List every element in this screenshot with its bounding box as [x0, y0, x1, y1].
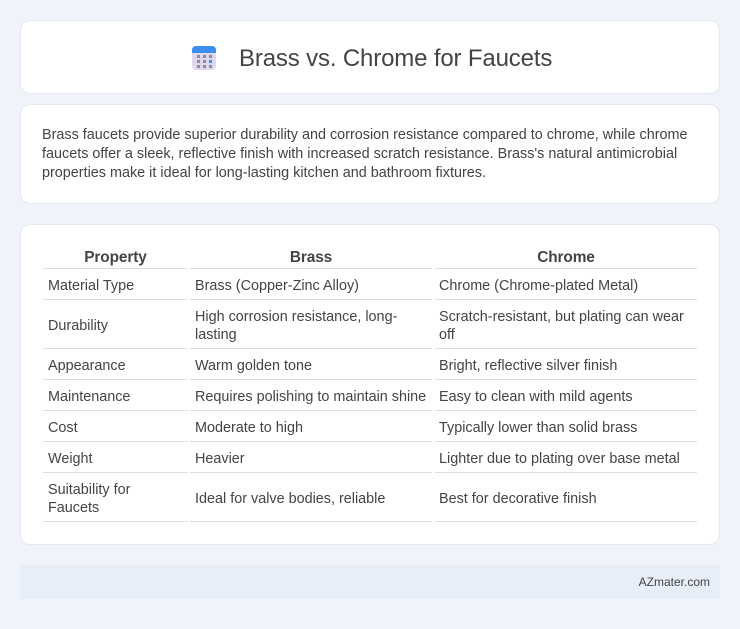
row: durability: High corrosion resistance, long-	[195, 309, 397, 325]
row: suitability for faucets: Faucets	[48, 500, 99, 516]
row: maintenance: Maintenance	[48, 389, 130, 405]
table header: Brass	[290, 249, 332, 266]
panel: summary	[20, 104, 720, 204]
row: suitability for faucets	[48, 482, 597, 516]
footer credit: AZmater.com	[639, 575, 710, 589]
row: maintenance	[48, 389, 633, 405]
row: appearance: Appearance	[48, 358, 126, 374]
row: durability: lasting	[195, 327, 237, 343]
row: cost: Moderate to high	[195, 420, 303, 436]
row: suitability for faucets: Ideal for valve bodies, reliable	[195, 491, 385, 507]
row: maintenance: Requires polishing to maintain shine	[195, 389, 426, 405]
panel: title card	[20, 20, 720, 94]
summary text: Brass faucets provide superior durability and corrosion resistance compared to chrome, while chrome	[42, 127, 687, 143]
table header	[84, 249, 595, 266]
footer bar	[20, 565, 720, 599]
row: material type: Brass (Copper-Zinc Alloy)	[195, 278, 359, 294]
row: maintenance: Easy to clean with mild agents	[439, 389, 633, 405]
table header: Chrome	[537, 249, 595, 266]
row: material type	[48, 278, 638, 294]
row: cost: Typically lower than solid brass	[439, 420, 637, 436]
row: appearance: Bright, reflective silver finish	[439, 358, 617, 374]
panel: comparison table	[20, 224, 720, 545]
row: weight: Heavier	[195, 451, 245, 467]
row: cost: Cost	[48, 420, 78, 436]
summary text: properties make it ideal for long-lasting kitchen and bathroom fixtures.	[42, 165, 486, 181]
row: durability: off	[439, 327, 455, 343]
summary text: faucets offer a sleek, reflective finish with increased scratch resistance. Brass's natural antimicrobial	[42, 146, 677, 162]
row: suitability for faucets: Best for decorative finish	[439, 491, 597, 507]
summary text	[42, 127, 687, 181]
row: durability: Durability	[48, 318, 108, 334]
table header: Property	[84, 249, 147, 266]
title: Brass vs. Chrome for Faucets	[239, 45, 552, 72]
row: weight: Weight	[48, 451, 93, 467]
row: material type: Material Type	[48, 278, 134, 294]
row: material type: Chrome (Chrome-plated Metal)	[439, 278, 638, 294]
row: suitability for faucets: Suitability for	[48, 482, 130, 498]
row: cost	[48, 420, 637, 436]
icon: calendar	[192, 46, 216, 70]
row: durability	[48, 309, 684, 343]
row: weight: Lighter due to plating over base metal	[439, 451, 680, 467]
row: weight	[48, 451, 680, 467]
comparison table	[43, 249, 697, 522]
row: durability: Scratch-resistant, but plating can wear	[439, 309, 684, 325]
row: appearance	[48, 358, 617, 374]
row: appearance: Warm golden tone	[195, 358, 312, 374]
